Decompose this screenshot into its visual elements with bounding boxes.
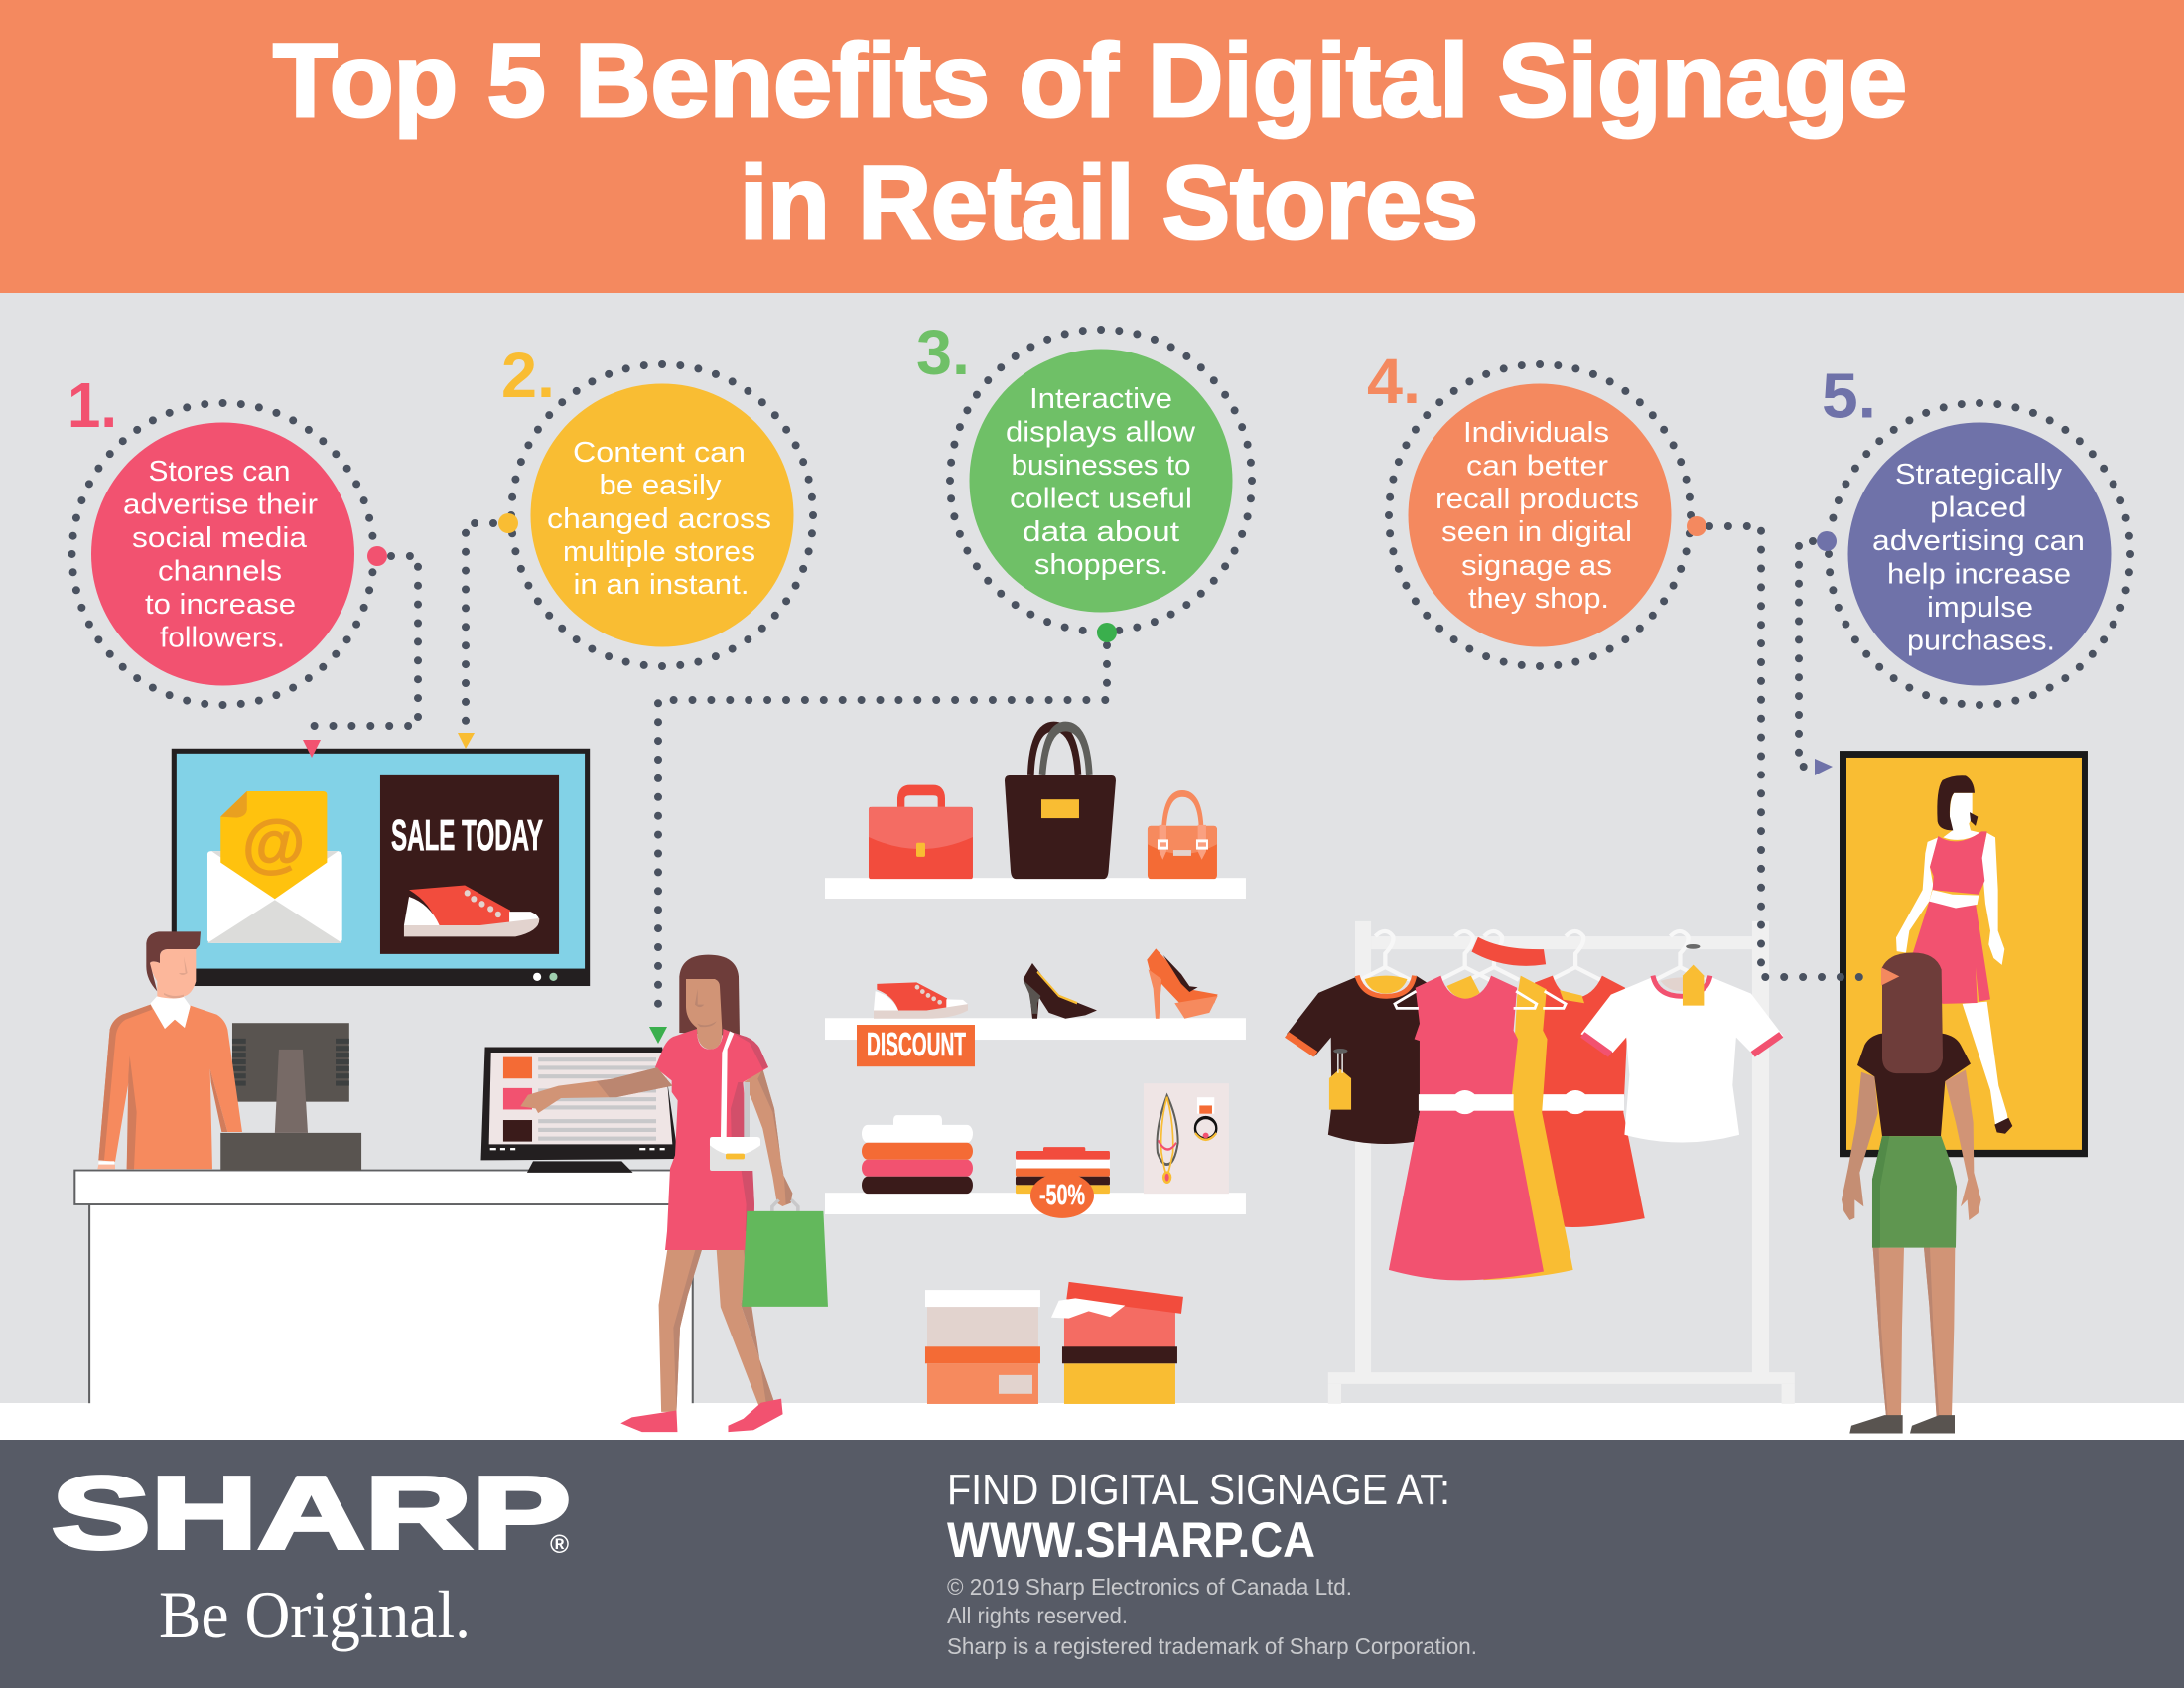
- benefit 5 text: impulse: [1927, 592, 2033, 624]
- discount label: DISCOUNT: [867, 1026, 966, 1062]
- title: Top 5 Benefits of Digital Signage: [273, 23, 1907, 139]
- black tote bag: [1005, 727, 1116, 879]
- header banner: [0, 0, 2184, 293]
- left shoe box: [925, 1290, 1040, 1404]
- register terminal: [232, 1023, 349, 1133]
- benefit 4 text: Individuals: [1463, 417, 1609, 449]
- connector 2: [458, 513, 518, 749]
- orange handbag: [1148, 793, 1217, 879]
- number 5: 5.: [1822, 359, 1876, 431]
- store counter: [60, 1171, 854, 1440]
- white t-shirt: [1580, 944, 1783, 1143]
- benefit 1 text: channels: [158, 556, 282, 588]
- benefit 3 text: shoppers.: [1034, 549, 1168, 581]
- benefit 4 text: can better: [1466, 451, 1608, 483]
- benefit 5 text: placed: [1930, 492, 2027, 524]
- benefit 2 text: multiple stores: [563, 536, 755, 568]
- benefit 1: [68, 369, 373, 705]
- benefit 1 text: Stores can: [149, 456, 290, 488]
- discount tag background: [857, 1025, 975, 1066]
- copyright: © 2019 Sharp Electronics of Canada Ltd.: [947, 1574, 1352, 1600]
- minus fifty percent label: -50%: [1039, 1180, 1085, 1211]
- benefit 3 text: [1006, 383, 1196, 581]
- benefit 2 text: in an instant.: [574, 569, 749, 601]
- benefit 4 text: recall products: [1435, 484, 1639, 515]
- customer woman: [520, 955, 828, 1432]
- benefit 3 text: displays allow: [1006, 417, 1196, 449]
- woman viewing poster: [1842, 952, 1981, 1433]
- benefit 3 text: businesses to: [1011, 450, 1191, 482]
- footer: [0, 1440, 2184, 1688]
- benefit 4 text: they shop.: [1468, 583, 1609, 615]
- benefit 5 text: Strategically: [1895, 459, 2063, 491]
- website: WWW.SHARP.CA: [947, 1512, 1315, 1568]
- benefit 2 text: [547, 437, 771, 601]
- title: in Retail Stores: [740, 145, 1478, 261]
- benefit 5 text: [1872, 459, 2085, 657]
- copyright: Sharp is a registered trademark of Sharp Corporation.: [947, 1633, 1477, 1659]
- digital poster with mannequin: [1840, 751, 2088, 1157]
- sale today text: SALE TODAY: [391, 811, 543, 860]
- red briefcase: [869, 790, 973, 879]
- benefit 1 text: advertise their: [123, 489, 318, 520]
- benefit 5: [1822, 359, 2130, 705]
- benefit 3 text: collect useful: [1010, 483, 1192, 514]
- tagline: Be Original.: [159, 1577, 471, 1652]
- number 3: 3.: [916, 317, 970, 388]
- red sneaker: [874, 982, 968, 1019]
- benefit 3 text: data about: [1023, 516, 1179, 548]
- benefit 4 text: signage as: [1461, 550, 1612, 582]
- copyright: All rights reserved.: [947, 1603, 1128, 1628]
- benefit 2 text: Content can: [573, 437, 746, 469]
- number 1: 1.: [68, 369, 117, 441]
- benefit 3: [916, 317, 1252, 632]
- floor: [0, 1403, 2184, 1440]
- pointing arm: [520, 1067, 672, 1113]
- benefit 5 text: purchases.: [1907, 626, 2055, 657]
- orange heel shoe: [1147, 948, 1218, 1019]
- benefit 1 text: [123, 456, 318, 653]
- number 4: 4.: [1367, 346, 1421, 417]
- jewelry card: [1144, 1083, 1229, 1194]
- folded clothes stack: [862, 1115, 973, 1194]
- benefit 1 text: followers.: [160, 622, 285, 653]
- copyright: [947, 1574, 1477, 1659]
- right shoe box: [1051, 1282, 1183, 1404]
- at sign: @: [242, 806, 305, 879]
- benefit 4 text: seen in digital: [1441, 516, 1632, 548]
- benefit 4: [1367, 346, 1691, 666]
- black t-shirt: [1287, 976, 1427, 1144]
- connector 5: [1799, 531, 1837, 775]
- benefit 1 text: social media: [132, 522, 308, 554]
- benefit 5 text: help increase: [1887, 558, 2071, 590]
- title: [273, 23, 1907, 261]
- number 2: 2.: [501, 340, 555, 411]
- benefit 2: [501, 340, 813, 666]
- black heel shoe: [1024, 963, 1097, 1019]
- connector 1: [303, 546, 418, 758]
- benefit 2 text: changed across: [547, 503, 771, 535]
- benefit 4 text: [1435, 417, 1639, 615]
- cashier: [97, 931, 242, 1169]
- registered mark: ®: [550, 1529, 569, 1559]
- cashier and terminal: [97, 931, 361, 1171]
- clothing rack: [1287, 921, 1795, 1404]
- red dress: [1533, 976, 1645, 1227]
- benefit 3 text: Interactive: [1029, 383, 1172, 415]
- pink dress: [1389, 976, 1566, 1280]
- wall display: email and sale today: [172, 749, 590, 986]
- discounted clothes stack: [1016, 1147, 1110, 1218]
- yellow dress: [1483, 976, 1573, 1280]
- find digital signage: FIND DIGITAL SIGNAGE AT:: [947, 1466, 1450, 1514]
- register base: [220, 1133, 361, 1171]
- red headband: [1471, 937, 1546, 966]
- benefit 5 text: advertising can: [1872, 525, 2085, 557]
- shelves and products: [825, 727, 1246, 1404]
- connector 3: [649, 623, 1117, 1044]
- benefit 1 text: to increase: [145, 589, 296, 621]
- touch screen kiosk: [480, 1048, 678, 1173]
- benefit 2 text: be easily: [600, 470, 722, 501]
- sharp logo: SHARP: [52, 1456, 571, 1570]
- shopping bag: [742, 1199, 828, 1307]
- connector 4: [1687, 516, 1876, 977]
